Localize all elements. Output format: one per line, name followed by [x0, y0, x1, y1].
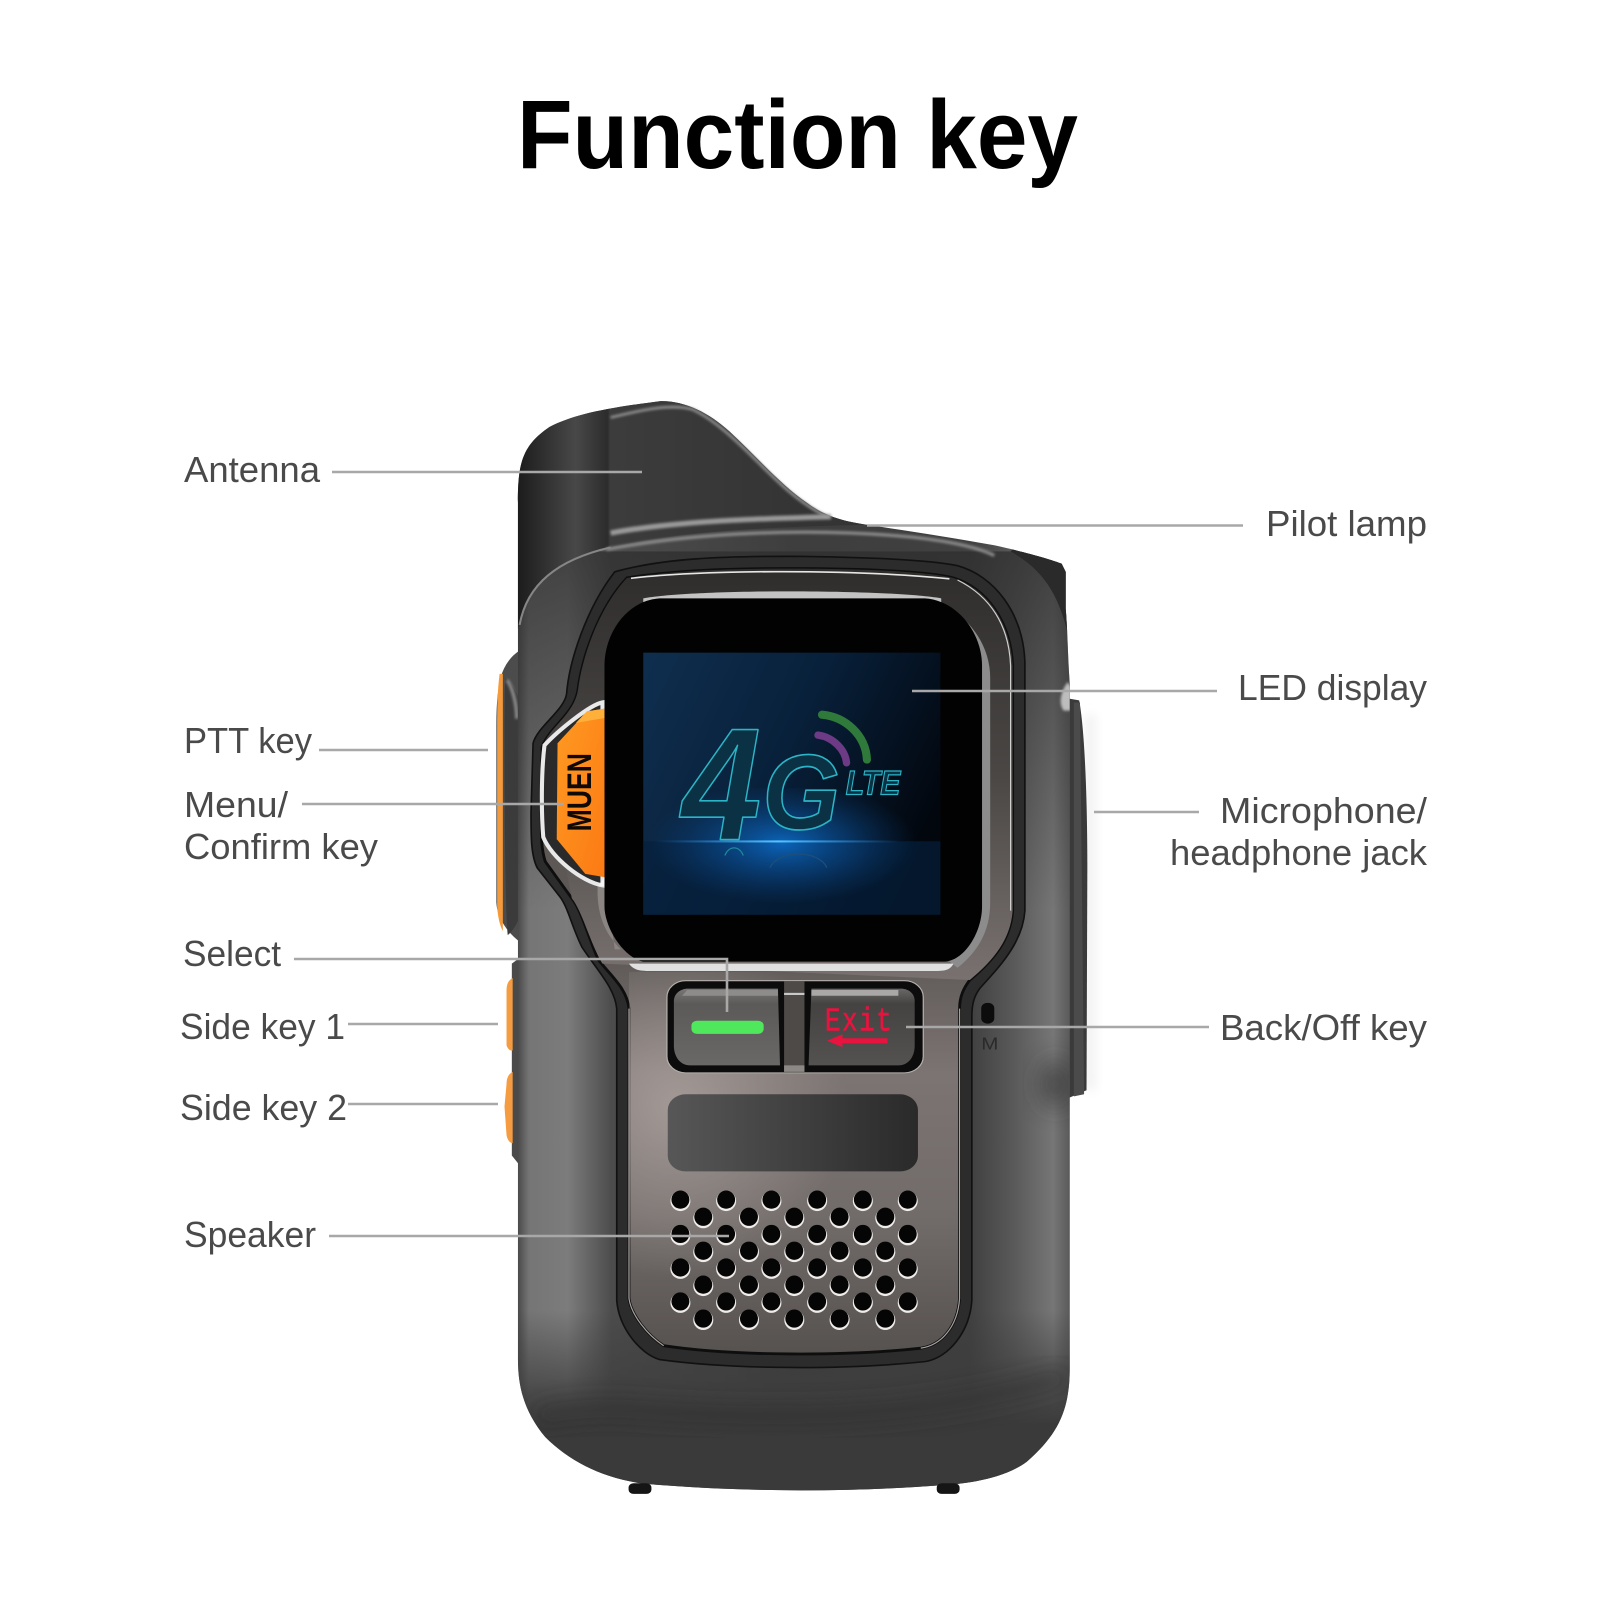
menu confirm key: MUEN	[561, 753, 599, 831]
rubber feet	[629, 1483, 960, 1494]
label: Menu/Confirm key: Confirm key	[184, 826, 378, 867]
label: Antenna: Antenna	[184, 449, 321, 490]
lower panel, coordinates squashed to match the keypad crop	[629, 981, 998, 1494]
4G LTE logo: LTE	[846, 765, 901, 803]
label: Side key 1: Side key 1	[180, 1006, 345, 1047]
display bezel highlights	[598, 591, 990, 971]
side keys 1 and 2	[504, 958, 520, 1166]
microphone hole and M mark	[981, 1003, 998, 1054]
4G LTE logo: G	[762, 732, 840, 852]
label: Microphone/headphone jack: headphone jack	[1170, 832, 1428, 873]
label: Microphone/headphone jack: Microphone/	[1220, 790, 1427, 831]
label: PTT key: PTT key	[184, 720, 312, 761]
label: Side key 2: Side key 2	[180, 1087, 347, 1128]
device: walkie-talkie	[496, 401, 1096, 1498]
label: Back/Off key: Back/Off key	[1220, 1007, 1427, 1048]
screen	[604, 598, 982, 962]
title: Function key	[517, 80, 1078, 189]
label: Select	[183, 933, 727, 1012]
label: Select: Select	[183, 933, 281, 974]
4G LTE logo	[679, 695, 901, 874]
LCD image	[643, 653, 940, 915]
speaker grille	[670, 1191, 918, 1330]
label: Microphone/headphone jack	[1094, 790, 1428, 873]
front panel outer ring	[531, 556, 1025, 1368]
front metal panel	[541, 569, 1013, 1354]
microphone hole and M mark: M	[981, 1034, 998, 1054]
dark plate	[668, 1094, 918, 1171]
menu confirm key	[542, 702, 604, 886]
label: Menu/Confirm key	[184, 784, 564, 867]
centre divider	[784, 981, 804, 1072]
label: Speaker: Speaker	[184, 1214, 316, 1255]
label: Menu/Confirm key: Menu/	[184, 784, 288, 825]
green indicator	[691, 1021, 764, 1034]
label: LED display: LED display	[1238, 667, 1427, 708]
exit key: Exit	[825, 1003, 892, 1041]
right side button strip	[1068, 698, 1096, 1098]
PTT key housing	[496, 647, 525, 945]
exit key	[809, 989, 915, 1065]
device body	[504, 401, 1084, 1498]
select key	[674, 989, 780, 1065]
label: Pilot lamp: Pilot lamp	[1266, 503, 1427, 544]
4G LTE logo: 4	[679, 695, 761, 874]
select and exit key surround	[667, 981, 923, 1073]
antenna	[518, 401, 994, 629]
